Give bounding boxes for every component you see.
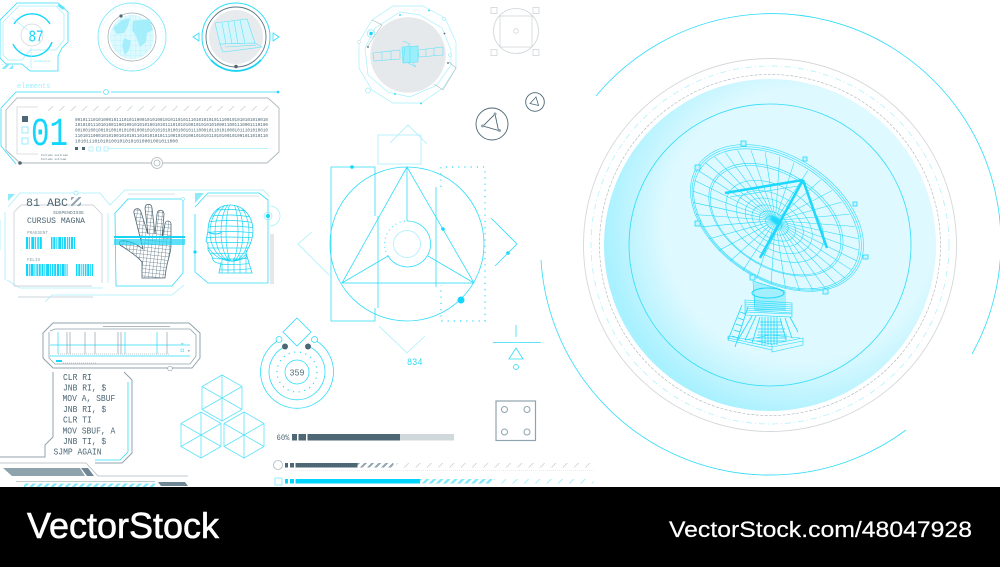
side hatch [270,234,274,284]
gauge corner hatch [2,64,13,69]
panel: ID card [0,190,270,297]
bar: gray progress [274,460,594,470]
binary text: 1010111010101001010101010001001011000 [75,140,179,144]
satellite [373,41,443,67]
footnote text: Include iostream [41,153,68,157]
dial nodes [276,336,318,350]
glowing disc [604,79,936,411]
left arrow [193,33,199,41]
binary text: 101010111010100110010010101010010101110101010010101010100011001110001110100 [75,124,268,128]
icon: radio telescope wireframe [663,114,890,352]
satellite polygons [359,6,456,103]
satellite disc [370,17,446,93]
code lines: SJMP AGAIN [54,446,102,458]
panel: HUD gauge 87 [0,3,68,71]
hub ring [388,221,431,267]
binary text: 001001001001010010101001000101010101010010010111000101101010001011101010010 [75,130,268,134]
target dot [264,206,280,226]
main circle [330,167,484,321]
satellite brackets [367,20,456,90]
panel: hand scan [45,194,185,302]
icon: network triangle large [476,108,508,140]
panel: radar dish dial [541,14,1000,475]
big number 01: 01 [31,113,68,158]
gauge frame [0,3,68,71]
code lines: MOV SBUF, A [62,426,116,436]
barcode 1 [26,237,76,249]
icon: globe badge [98,3,166,71]
scan bar [114,236,185,245]
icon: registration target [491,8,539,56]
head mesh [207,205,252,273]
right chevron [491,218,517,266]
outer arc top [596,14,1000,354]
hatch strip [47,106,269,111]
icon: laptop badge [193,3,279,71]
code lines: CLR TI [63,414,92,426]
dotted rectangle [441,167,485,321]
label praesent: PRAESENT [27,231,48,236]
bar label: 60% [276,434,290,443]
inner ring [629,104,911,386]
icon: isometric cubes [181,375,264,458]
outer arc bottom [541,260,906,475]
satellite nodes [358,10,452,104]
gauge value: 87 [28,28,44,48]
heading: elements: elements [17,83,51,91]
bar: 60 percent [276,434,454,443]
code frame [0,372,132,463]
pedestal [728,281,803,352]
cyan frame [1,92,278,164]
panel: head scan [193,193,280,284]
hub dotted arc [385,221,407,256]
head frames [193,193,268,283]
bottom chevron [379,326,425,353]
triangle [342,167,474,283]
top house [378,125,427,164]
code lines: JNB TI, $ [63,436,106,447]
footer band [0,487,1000,567]
hatch [71,197,81,206]
hub inner ring [394,230,420,258]
code lines: JNB RI, $ [63,404,106,415]
barcode 2 [26,264,93,276]
laptop [215,19,262,52]
gauge caption: elementum [34,59,50,63]
panel: bottom-left bars [0,463,188,487]
dial diamond [283,318,311,346]
icon: head wireframe [206,204,254,274]
right arrow [273,33,279,41]
gray frame [6,98,279,163]
binary text [75,119,268,144]
scope signals [50,332,190,363]
panel: central geometry [298,125,517,369]
code lines: MOV A, SBUF [62,393,116,404]
gauge rings [12,14,52,68]
code lines: JNB RI, $ [63,382,106,394]
laptop rings [202,3,270,71]
label felis: FELIS [27,258,41,263]
panel: binary readout [1,90,279,168]
rim lugs [695,141,868,294]
dial value: 359 [290,368,305,378]
status squares [22,116,28,144]
icon: network triangle small [526,93,544,111]
footnote text 2: Include istream [41,157,66,161]
feed struts [725,180,827,258]
gray rings [584,58,956,432]
code lines [54,372,116,458]
footer url: VectorStock.com/48047928 [669,517,972,542]
base highlight [342,282,474,284]
card frames [0,190,270,297]
code 81: 81 [26,198,40,210]
scope markers [56,343,190,362]
panel: assembly code [0,372,132,463]
icon: right marker [493,325,541,370]
left chevron [298,232,329,275]
inner bracket [17,107,38,154]
scope frame [43,323,200,368]
dish [663,114,890,322]
code lines: CLR RI [63,372,92,383]
label suspendisse: SUSPENDISSE [53,210,84,216]
binary text: 001011101010001011101011000101010010101101011101010101011100101010101010010 [75,119,268,123]
icon: square with four holes [496,401,536,440]
code ABC: ABC [47,198,68,210]
icon: satellite badge [358,6,456,104]
hand frames [45,194,184,302]
head outline [206,205,253,273]
panel: dial 359 [260,318,334,408]
icon: hand wireframe [119,204,171,278]
vertical bars [378,187,436,308]
bar: cyan progress [275,478,594,485]
binary text: 110101100010101001010101101010101011100101010010101011010100101001011010110 [75,135,268,139]
left rectangle [331,167,375,321]
label cursus magna: CURSUS MAGNA [27,216,86,226]
nodes [350,165,510,304]
value 834: 834 [407,358,422,369]
progress squares [75,147,268,151]
dial rings [260,339,334,408]
footer logo: VectorStock [27,505,220,546]
panel: signal scope [43,323,200,371]
